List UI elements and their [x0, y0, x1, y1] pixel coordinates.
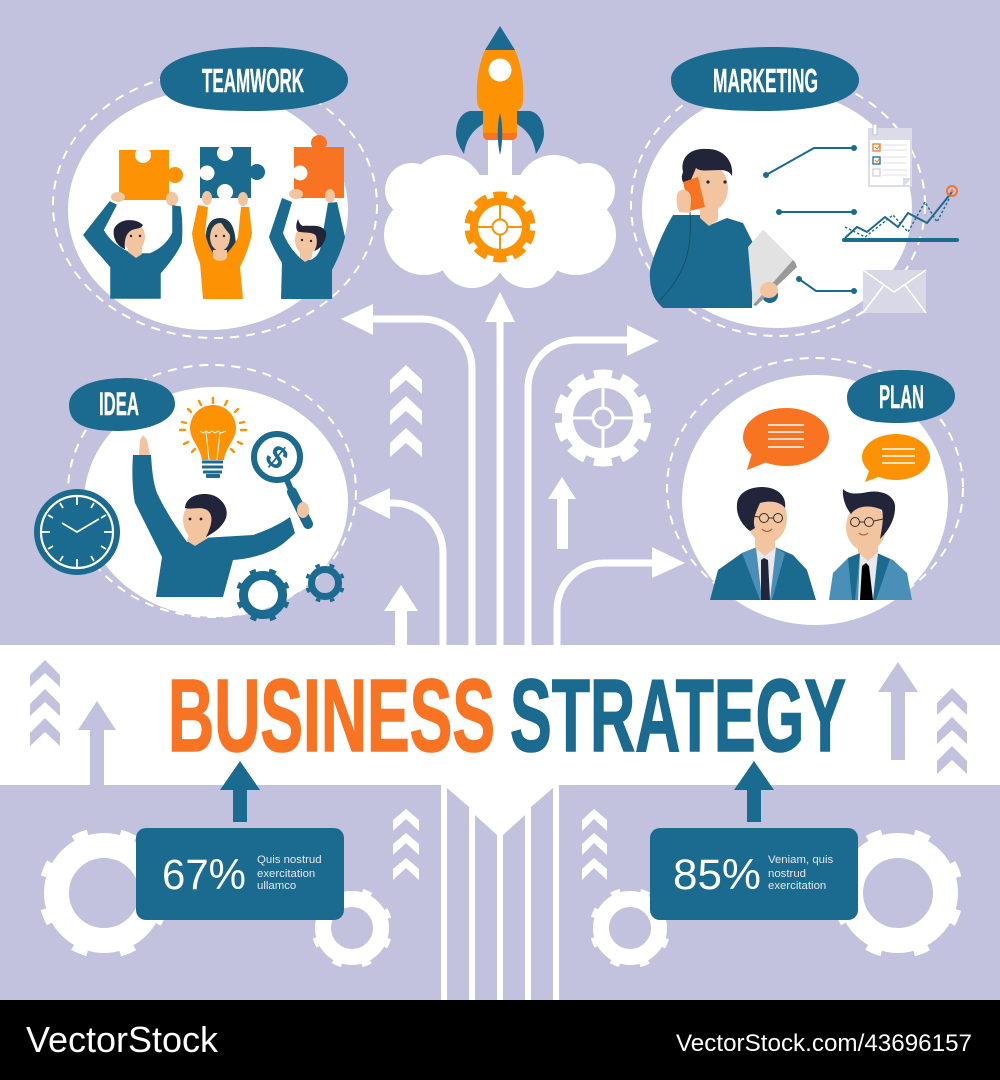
icon: puzzle pieces: [119, 135, 344, 200]
person: teamwork right: [269, 189, 345, 299]
person: businessman right: [829, 489, 912, 600]
icon: envelope: [863, 270, 926, 313]
footer: watermark bar: VectorStock: [26, 1019, 219, 1060]
heading: plan: PLAN: [879, 379, 924, 415]
chart: growth line: [844, 186, 957, 240]
banner: title strip: [0, 645, 1000, 785]
stat card: 67%: Quis nostrud: [257, 854, 322, 866]
stat card: 67%: exercitation: [257, 868, 315, 880]
speech bubble: orange large: [743, 408, 829, 470]
icon: white crosshair gear: [558, 374, 648, 462]
speech bubble: orange small: [862, 434, 930, 482]
arrows: white path network: [341, 292, 685, 646]
stat card: 85%: nostrud: [768, 868, 806, 880]
icon: checklist: [868, 124, 912, 187]
icon: light bulb: [180, 398, 246, 478]
icon: magnifier with dollar: [254, 434, 309, 524]
icon: magnifier with dollar: $: [259, 437, 296, 477]
connector lines: [763, 145, 857, 294]
chevrons: banner right: [937, 688, 967, 774]
stat card: 67%: 67%: [162, 851, 246, 899]
decorative arrow: right lavender: [878, 662, 918, 760]
gears: bottom white: [23, 812, 979, 978]
icon: gears: [230, 559, 349, 628]
decorative arrow: left lavender: [78, 701, 116, 785]
panel: teamwork: [53, 47, 377, 338]
heading: teamwork: TEAMWORK: [202, 62, 304, 99]
stat card: 85%: exercitation: [768, 880, 826, 892]
panel: cloud with gear: [384, 138, 616, 288]
heading: idea: [69, 378, 175, 431]
icon: rocket: [456, 26, 544, 155]
stat card: 85%: [650, 828, 858, 920]
arrow: blue right: [734, 761, 774, 822]
chevrons: bottom left: [393, 809, 419, 880]
panel: idea: [34, 365, 356, 628]
stat card: 67%: [136, 828, 344, 920]
stat card: 85%: Veniam, quis: [768, 854, 834, 866]
title: business: BUSINESS: [168, 658, 495, 773]
chevrons: banner left: [30, 660, 60, 746]
heading: plan: [847, 370, 955, 423]
chevrons: bottom right: [582, 809, 607, 880]
stat card: 67%: ullamco: [257, 880, 296, 892]
panel: marketing: [631, 47, 957, 336]
icon: clock: [34, 489, 120, 575]
heading: marketing: [671, 47, 859, 111]
footer: watermark bar: [0, 1000, 1000, 1080]
person: teamwork middle: [192, 191, 252, 299]
stat card: 85%: 85%: [673, 851, 761, 899]
chevrons: upper left: [390, 365, 422, 457]
heading: teamwork: [160, 47, 348, 111]
person: businessman left: [710, 487, 816, 600]
footer: watermark bar: VectorStock.com/43696157: [676, 1030, 972, 1057]
heading: marketing: MARKETING: [713, 62, 818, 99]
icon: orange gear: [468, 194, 532, 260]
center trunk: white lines with down chevron: [441, 785, 559, 1000]
panel: plan: [667, 358, 963, 625]
arrow: blue left: [220, 761, 260, 822]
person: teamwork left: [84, 192, 182, 298]
person: man with raised arm: [132, 435, 295, 597]
person: man on phone: [650, 149, 797, 308]
heading: idea: IDEA: [99, 386, 139, 422]
